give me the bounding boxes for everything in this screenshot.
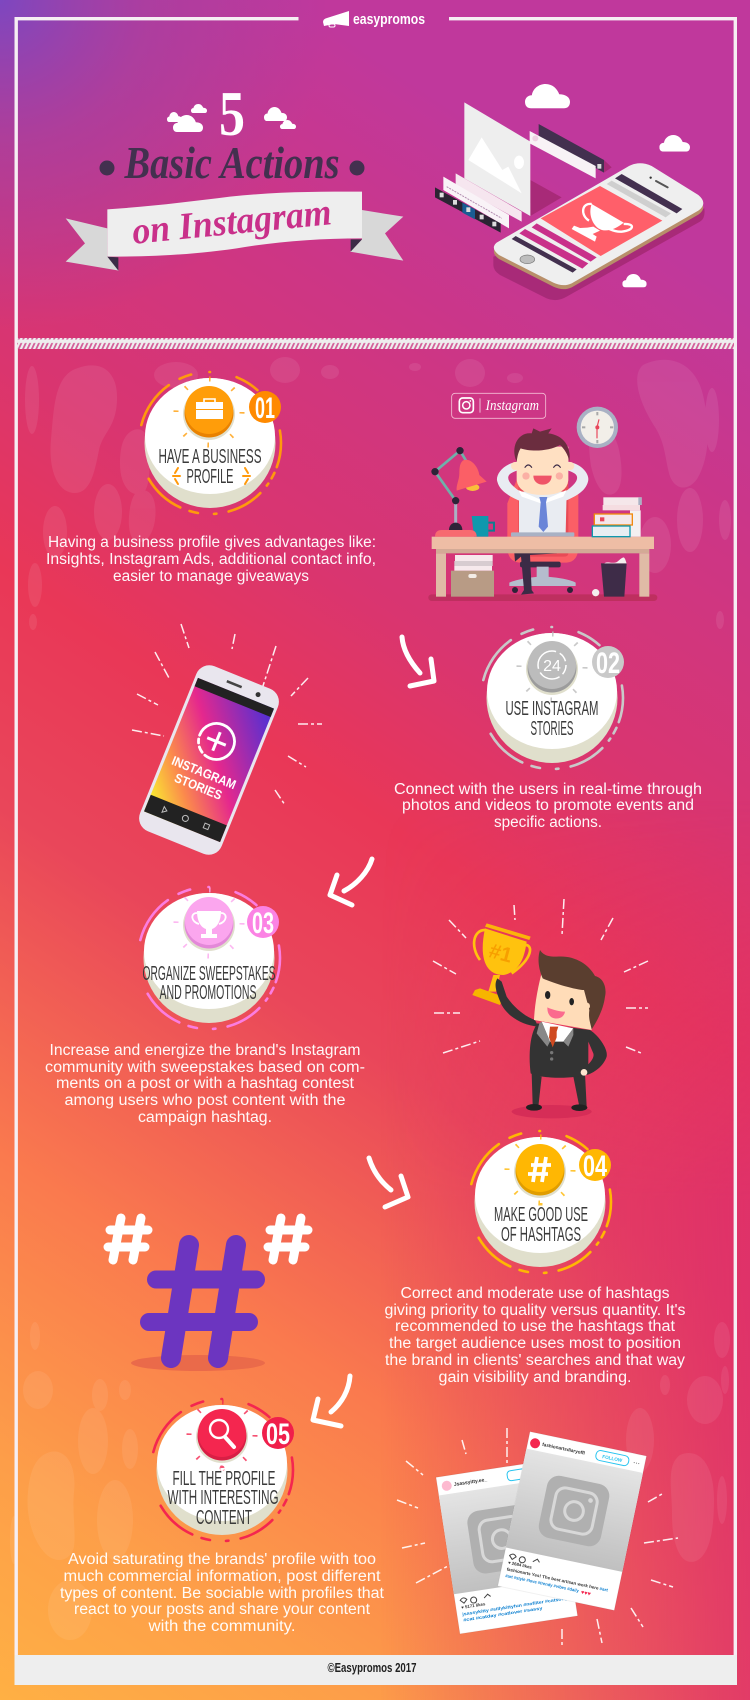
hash big: [149, 1245, 256, 1358]
hash left: [108, 1218, 148, 1260]
front post: fashionarts Yes! The best artisan work here #art: [506, 1567, 609, 1593]
badge 05: 05: [266, 1418, 290, 1451]
heading: make good use of hashtags: [494, 1203, 588, 1246]
logo: easypromos: [323, 11, 425, 28]
panel: step 1: [139, 372, 281, 514]
heading: fill the profile: [168, 1467, 278, 1529]
icon: briefcase button: [176, 379, 242, 445]
illustration: instagram posts: [397, 1428, 678, 1645]
stories plus icon: [193, 718, 240, 765]
heading: make good use of hashtags: MAKE GOOD USE: [494, 1203, 588, 1226]
panel: step 2: [481, 627, 624, 769]
instagram tag: [452, 393, 546, 418]
trophy: [572, 204, 632, 242]
text: step 2: specific actions.: [494, 814, 602, 831]
background blobs: lower section: [10, 1322, 730, 1640]
text: step 3: community with sweepstakes based on com-: [45, 1059, 365, 1076]
clouds beside 5: [167, 104, 296, 132]
text: step 4: gain visibility and branding.: [438, 1369, 632, 1386]
text: step 4: Correct and moderate use of hashtags: [400, 1285, 670, 1302]
back post: #cat #catday #catlover #sassy: [463, 1605, 543, 1622]
text: step 2: [394, 781, 702, 831]
title: 5: 5: [219, 78, 245, 149]
illustration: isometric phone: [435, 84, 705, 300]
illustration: stories phone: INSTAGRAM: [170, 753, 238, 792]
icon: magnifier button: [189, 1402, 255, 1468]
heading: organize sweepstakes: [142, 962, 276, 1004]
icon: hash button: [507, 1137, 573, 1203]
books: [592, 497, 642, 537]
arrow: step 3 to 4: [369, 1158, 408, 1207]
front post: FOLLOW: [602, 1454, 623, 1463]
red tray: [435, 530, 477, 537]
heading: have a business profile: [158, 445, 262, 488]
text: step 3: Increase and energize the brand's Instagram: [50, 1042, 360, 1059]
badge 04: 04: [583, 1150, 607, 1183]
heading: use instagram stories: [506, 697, 598, 740]
panel: step 3: [138, 887, 280, 1029]
text: step 1: Having a business profile gives advantages like:: [48, 534, 376, 551]
lamp: [431, 447, 487, 530]
front post: #art #style #love #trendy #vibes #daily: [505, 1573, 580, 1593]
back post: Jsassyitty.ee_: [454, 1477, 488, 1488]
text: step 5: with the community.: [147, 1618, 296, 1635]
chair: [507, 480, 578, 563]
text: step 3: among users who post content with the: [64, 1092, 345, 1109]
trash: [592, 557, 627, 597]
text: step 4: [384, 1285, 686, 1386]
back post: [436, 1459, 578, 1634]
front post: ♥♥♥: [580, 1590, 592, 1598]
text: step 5: types of content. Be sociable with profiles that: [60, 1585, 385, 1602]
heading: make good use of hashtags: OF HASHTAGS: [501, 1223, 581, 1246]
arrow: step 2 to 3: [330, 859, 372, 905]
icon: trophy button: [176, 890, 242, 956]
icon: 24h button: [519, 634, 585, 700]
arrow: step 1 to 2: [402, 637, 434, 686]
heading: use instagram stories: STORIES: [530, 717, 574, 740]
trophy: #1: [487, 939, 515, 968]
hash right: [268, 1218, 308, 1260]
text: step 5: much commercial information, post different: [64, 1568, 381, 1585]
box: [451, 555, 494, 597]
logo: easypromos: easypromos: [353, 12, 425, 28]
badge 02: 02: [596, 647, 620, 680]
trophy: [472, 923, 531, 1005]
icon: 24h button: 24: [543, 658, 561, 675]
badge 03: [247, 906, 279, 940]
clouds around phone: [525, 84, 690, 287]
body: [496, 978, 538, 1027]
illustration: stories phone: [132, 624, 322, 859]
instagram tag: Instagram: [485, 398, 539, 414]
comment bars: [539, 124, 604, 173]
text: step 1: [46, 534, 376, 585]
illustration: stories phone: STORIES: [172, 770, 225, 803]
head: [534, 967, 592, 1030]
phone body: [494, 163, 703, 285]
text: step 5: Avoid saturating the brands' profile with too: [68, 1551, 376, 1568]
text: step 1: easier to manage giveaways: [113, 568, 309, 585]
illustration: man at desk: [428, 393, 657, 601]
heading: have a business profile: PROFILE: [186, 465, 234, 488]
text: step 3: campaign hashtag.: [138, 1109, 272, 1126]
footer: [14, 1655, 737, 1685]
front post: [498, 1432, 646, 1610]
heading: Basic Actions: Basic Actions: [124, 137, 340, 188]
front post: ♥ 2684 likes: [508, 1560, 533, 1570]
front post: fashionartsdiaryoffl: [542, 1442, 585, 1456]
panel: step 4: [469, 1131, 611, 1273]
text: step 1: Insights, Instagram Ads, additional contact info,: [46, 551, 376, 568]
text: step 3: [45, 1042, 365, 1126]
badge 01: 01: [255, 392, 275, 425]
footer: ©Easypromos 2017: [328, 1661, 417, 1675]
text: step 5: react to your posts and share your content: [74, 1601, 371, 1618]
clock: [577, 407, 618, 448]
text: step 4: giving priority to quality versus quantity. It's: [384, 1302, 686, 1319]
heading: have a business profile: HAVE A BUSINESS: [158, 445, 262, 468]
panel: step 5: [151, 1399, 294, 1541]
screen: [541, 186, 662, 256]
heading: fill the profile: WITH INTERESTING: [168, 1486, 278, 1509]
badge 03: 03: [252, 907, 274, 940]
heading: use instagram stories: USE INSTAGRAM: [506, 697, 598, 720]
phone shadow: [493, 208, 705, 300]
image panel: [464, 102, 530, 216]
text: step 4: the target audience uses most to position: [389, 1335, 681, 1352]
text: step 2: photos and videos to promote events and: [402, 797, 694, 814]
panel: step 3: ORGANIZE SWEEPSTAKES: [142, 962, 276, 985]
illustration: man with trophy: [433, 899, 648, 1118]
desk: [436, 549, 649, 553]
back post: jsassykitty #sillykittyfun #nofilter #catsofig: [461, 1595, 569, 1617]
background blobs: upper section: [25, 357, 731, 630]
person: [497, 428, 588, 595]
text: step 4: the brand in clients' searches and that way: [385, 1352, 685, 1369]
heading: fill the profile: FILL THE PROFILE: [172, 1467, 276, 1490]
arrow: step 4 to 5: [313, 1376, 350, 1426]
badge 01: [249, 391, 281, 425]
separator band: [17, 338, 734, 349]
text: step 4: recommended to use the hashtags that: [395, 1318, 676, 1335]
heading: fill the profile: CONTENT: [196, 1506, 252, 1529]
mug: [472, 516, 488, 537]
heading: organize sweepstakes: AND PROMOTIONS: [160, 981, 256, 1004]
text: step 3: ments on a post or with a hashtag contest: [56, 1075, 355, 1092]
ribbon: on Instagram: on Instagram: [130, 191, 333, 253]
ribbon: on Instagram: [66, 191, 403, 271]
back post: ♥ 5171 likes: [461, 1601, 486, 1610]
text: step 5: [60, 1551, 385, 1635]
text: step 2: Connect with the users in real-time through: [394, 781, 702, 798]
stripes: [532, 223, 597, 262]
phone edge: [494, 167, 703, 289]
illustration: hashtags: [108, 1218, 308, 1371]
